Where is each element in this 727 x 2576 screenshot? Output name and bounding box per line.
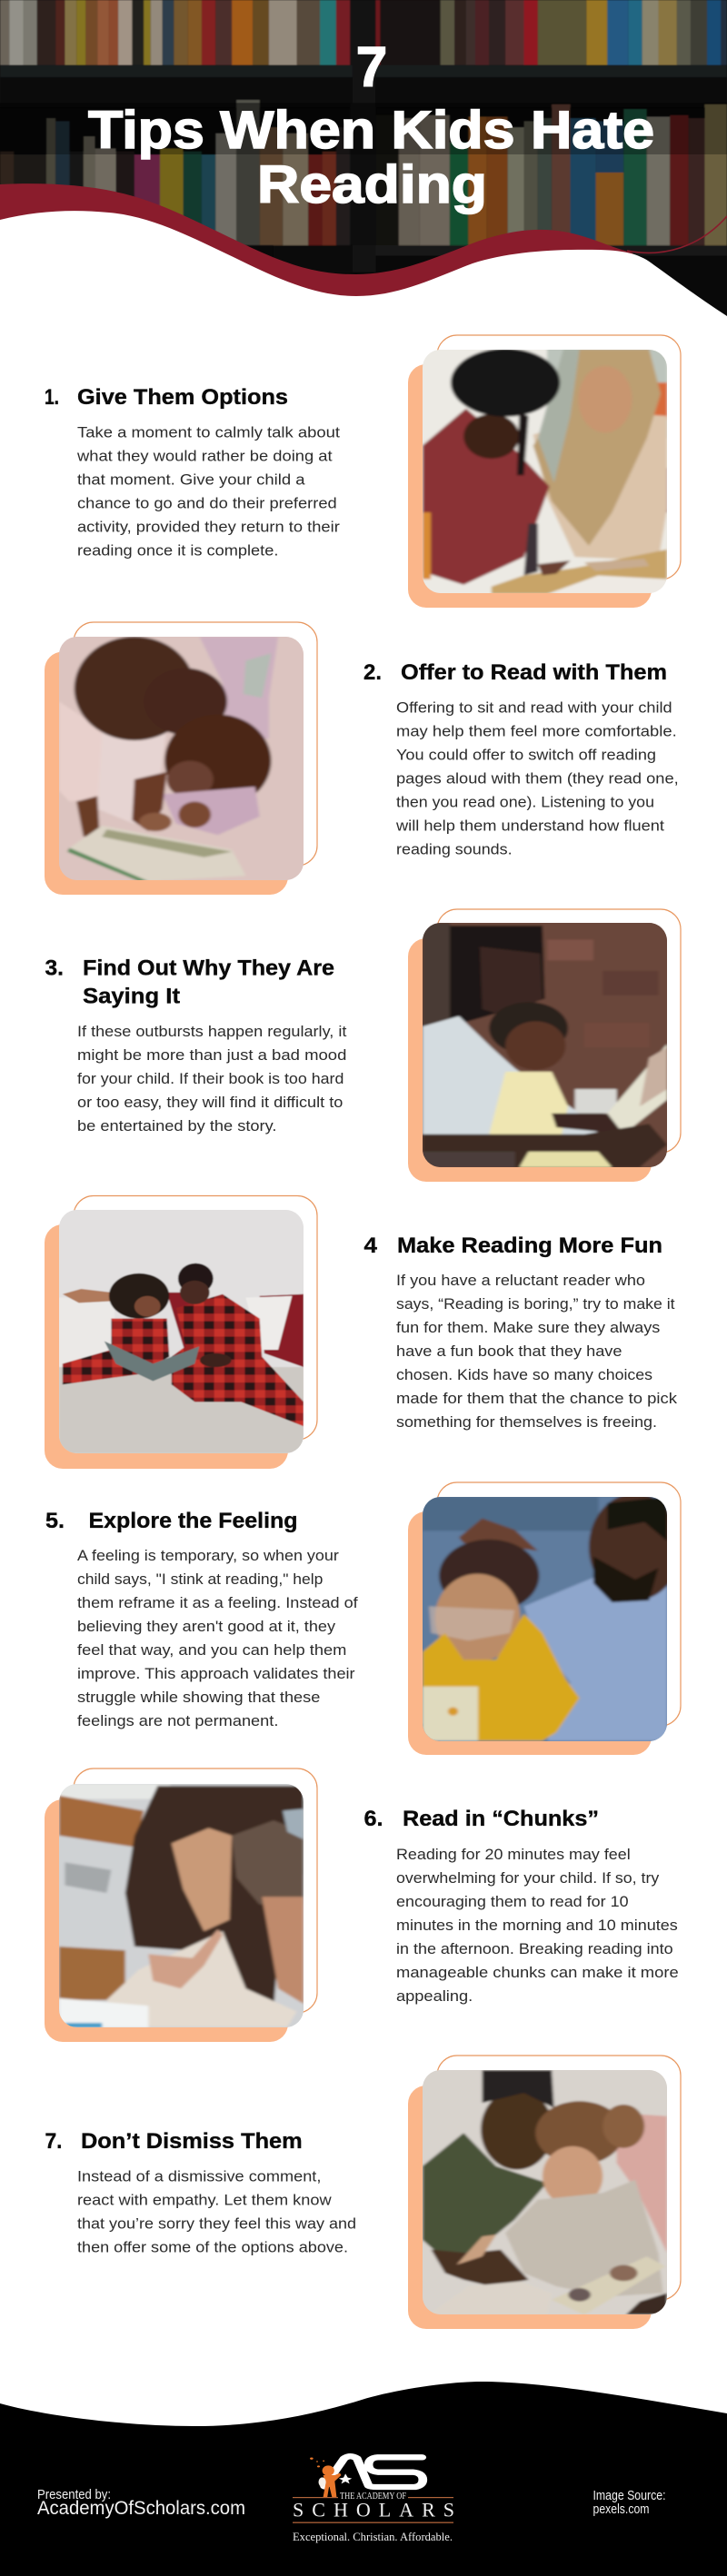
tip 5 text: Explore the Feeling bbox=[89, 1509, 298, 1533]
tip 2 text: pages aloud with them (they read one, bbox=[396, 770, 679, 787]
tip 7 text bbox=[45, 2129, 356, 2256]
tip 3 text: might be more than just a bad mood bbox=[77, 1047, 346, 1064]
footer: image source: Image Source: bbox=[593, 2489, 665, 2503]
tip 5 text: believing they aren't good at it, they bbox=[77, 1619, 336, 1635]
tip 6 text: 6. bbox=[364, 1807, 383, 1831]
tip 1 text: 1. bbox=[45, 385, 59, 410]
tip 2 text: 2. bbox=[364, 660, 382, 685]
tip 4 text: Make Reading More Fun bbox=[397, 1234, 662, 1258]
footer black wave bbox=[0, 2382, 727, 2576]
tip 2 text: then you read one). Listening to you bbox=[396, 794, 654, 810]
header bookshelf photo bbox=[0, 0, 727, 321]
tip 1 text: reading once it is complete. bbox=[77, 543, 278, 560]
tip 6 text: appealing. bbox=[396, 1988, 473, 2005]
tip 7 text: then offer some of the options above. bbox=[77, 2240, 348, 2256]
tip 2 text: reading sounds. bbox=[396, 841, 513, 857]
tip 7 text: react with empathy. Let them know bbox=[77, 2193, 332, 2209]
tip 2 text: Offer to Read with Them bbox=[401, 660, 667, 685]
photo: mother and child on quilt bbox=[55, 635, 306, 883]
tip 5 text: them reframe it as a feeling. Instead of bbox=[77, 1595, 358, 1611]
white wave body bbox=[0, 211, 727, 363]
tip 5 text: 5. bbox=[45, 1509, 65, 1533]
footer: image source: pexels.com bbox=[593, 2502, 649, 2517]
logo: The Academy of Scholars: SCHOLARS bbox=[293, 2498, 454, 2522]
tip 3 text: If these outbursts happen regularly, it bbox=[77, 1024, 347, 1040]
tip 3 text: 3. bbox=[45, 956, 64, 981]
tip 4 text: If you have a reluctant reader who bbox=[396, 1273, 645, 1289]
tip 1 text bbox=[45, 385, 340, 560]
tip 6 text: in the afternoon. Breaking reading into bbox=[396, 1941, 673, 1957]
footer: image source bbox=[593, 2489, 665, 2517]
tip 5 text bbox=[45, 1509, 358, 1729]
tip 5 text: feel that way, and you can help them bbox=[77, 1642, 346, 1659]
logo AS mark bbox=[324, 2456, 423, 2487]
tip 2 text: will help them understand how fluent bbox=[395, 817, 664, 834]
tip 3 text: or too easy, they will find it difficult to bbox=[77, 1095, 343, 1111]
tip 1 text: activity, provided they return to their bbox=[77, 520, 340, 536]
tip 2 photo frame bbox=[45, 622, 317, 895]
tip 1 text: that moment. Give your child a bbox=[77, 472, 305, 489]
photo: girl with finger on chin bbox=[55, 1782, 306, 2031]
tip 1 text: Take a moment to calmly talk about bbox=[77, 425, 340, 441]
tip 7 text: 7. bbox=[45, 2129, 62, 2154]
tip 7 text: Don’t Dismiss Them bbox=[81, 2129, 303, 2154]
tip 2 text: may help them feel more comfortable. bbox=[396, 723, 677, 739]
tip 6 text: minutes in the morning and 10 minutes bbox=[396, 1917, 678, 1934]
tip 6 text: manageable chunks can make it more bbox=[396, 1965, 679, 1981]
logo: The Academy of Scholars bbox=[293, 2456, 454, 2543]
tip 5 text: child says, "I stink at reading," help bbox=[77, 1571, 323, 1588]
logo: The Academy of Scholars: THE ACADEMY OF bbox=[340, 2492, 406, 2502]
tip 6 photo frame bbox=[45, 1769, 317, 2042]
footer: presented by: AcademyOfScholars.com bbox=[37, 2498, 245, 2519]
tip 6 text: Read in “Chunks” bbox=[403, 1807, 599, 1831]
tip 5 photo frame bbox=[408, 1482, 682, 1755]
tip 7 photo frame bbox=[408, 2056, 681, 2329]
tip 4 text: 4 bbox=[364, 1234, 378, 1258]
tip 4 text: fun for them. Make sure they always bbox=[396, 1320, 660, 1336]
tip 4 photo frame bbox=[45, 1195, 317, 1469]
title: 7 bbox=[356, 36, 387, 99]
photo: father and baby by brick wall bbox=[417, 918, 672, 1173]
photo: father and daughter reading picture book bbox=[417, 2066, 672, 2320]
tip 4 text: chosen. Kids have so many choices bbox=[396, 1367, 652, 1383]
tip 5 text: A feeling is temporary, so when your bbox=[77, 1548, 339, 1564]
photo: father and girl in yellow hoodie bbox=[423, 1497, 667, 1741]
title: Tips When Kids Hate bbox=[88, 101, 654, 160]
photo: father and daughter in plaid pajamas bbox=[55, 1207, 306, 1458]
tip 5 text: feelings are not permanent. bbox=[77, 1713, 278, 1729]
tip 5 text: struggle while showing that these bbox=[77, 1689, 320, 1706]
tip 5 text: improve. This approach validates their bbox=[77, 1666, 355, 1682]
tip 6 text: overwhelming for your child. If so, try bbox=[396, 1870, 660, 1887]
title bbox=[88, 36, 654, 214]
tip 2 text bbox=[364, 660, 679, 857]
logo: The Academy of Scholars: Exceptional. Christian. Affordable. bbox=[293, 2530, 453, 2543]
tip 3 text: be entertained by the story. bbox=[77, 1118, 276, 1134]
tip 6 text bbox=[364, 1807, 679, 2005]
tip 1 photo frame bbox=[408, 335, 681, 608]
title: Reading bbox=[257, 155, 487, 214]
tip 6 text: Reading for 20 minutes may feel bbox=[396, 1847, 631, 1863]
tip 1 text: what they would rather be doing at bbox=[76, 449, 333, 465]
footer: presented by: Presented by: bbox=[37, 2487, 111, 2502]
tip 7 text: Instead of a dismissive comment, bbox=[77, 2169, 321, 2185]
tip 4 text bbox=[364, 1234, 678, 1431]
tip 3 text: for your child. If their book is too hard bbox=[77, 1071, 344, 1087]
tip 3 text bbox=[45, 956, 347, 1134]
footer: presented by bbox=[37, 2487, 245, 2519]
tip 2 text: Offering to sit and read with your child bbox=[396, 699, 672, 716]
tip 2 text: You could offer to switch off reading bbox=[396, 747, 656, 763]
tip 3 text: Find Out Why They Are bbox=[83, 956, 334, 981]
tip 4 text: made for them that the chance to pick bbox=[396, 1391, 678, 1407]
tip 6 text: encouraging them to read for 10 bbox=[396, 1894, 629, 1910]
tip 3 photo frame bbox=[408, 909, 681, 1182]
tip 7 text: that you’re sorry they feel this way and bbox=[77, 2216, 356, 2233]
thin red swoosh line bbox=[627, 216, 727, 253]
photo: girl and teacher bbox=[417, 345, 672, 598]
logo child figure bbox=[310, 2457, 352, 2497]
tip 1 text: chance to go and do their preferred bbox=[77, 496, 337, 512]
red wave band bbox=[0, 183, 727, 327]
tip 4 text: says, “Reading is boring,” try to make it bbox=[396, 1296, 675, 1313]
tip 3 text: Saying It bbox=[83, 985, 180, 1008]
tip 1 text: Give Them Options bbox=[77, 385, 288, 410]
tip 4 text: something for themselves is freeing. bbox=[396, 1414, 657, 1431]
tip 4 text: have a fun book that they have bbox=[396, 1343, 622, 1360]
